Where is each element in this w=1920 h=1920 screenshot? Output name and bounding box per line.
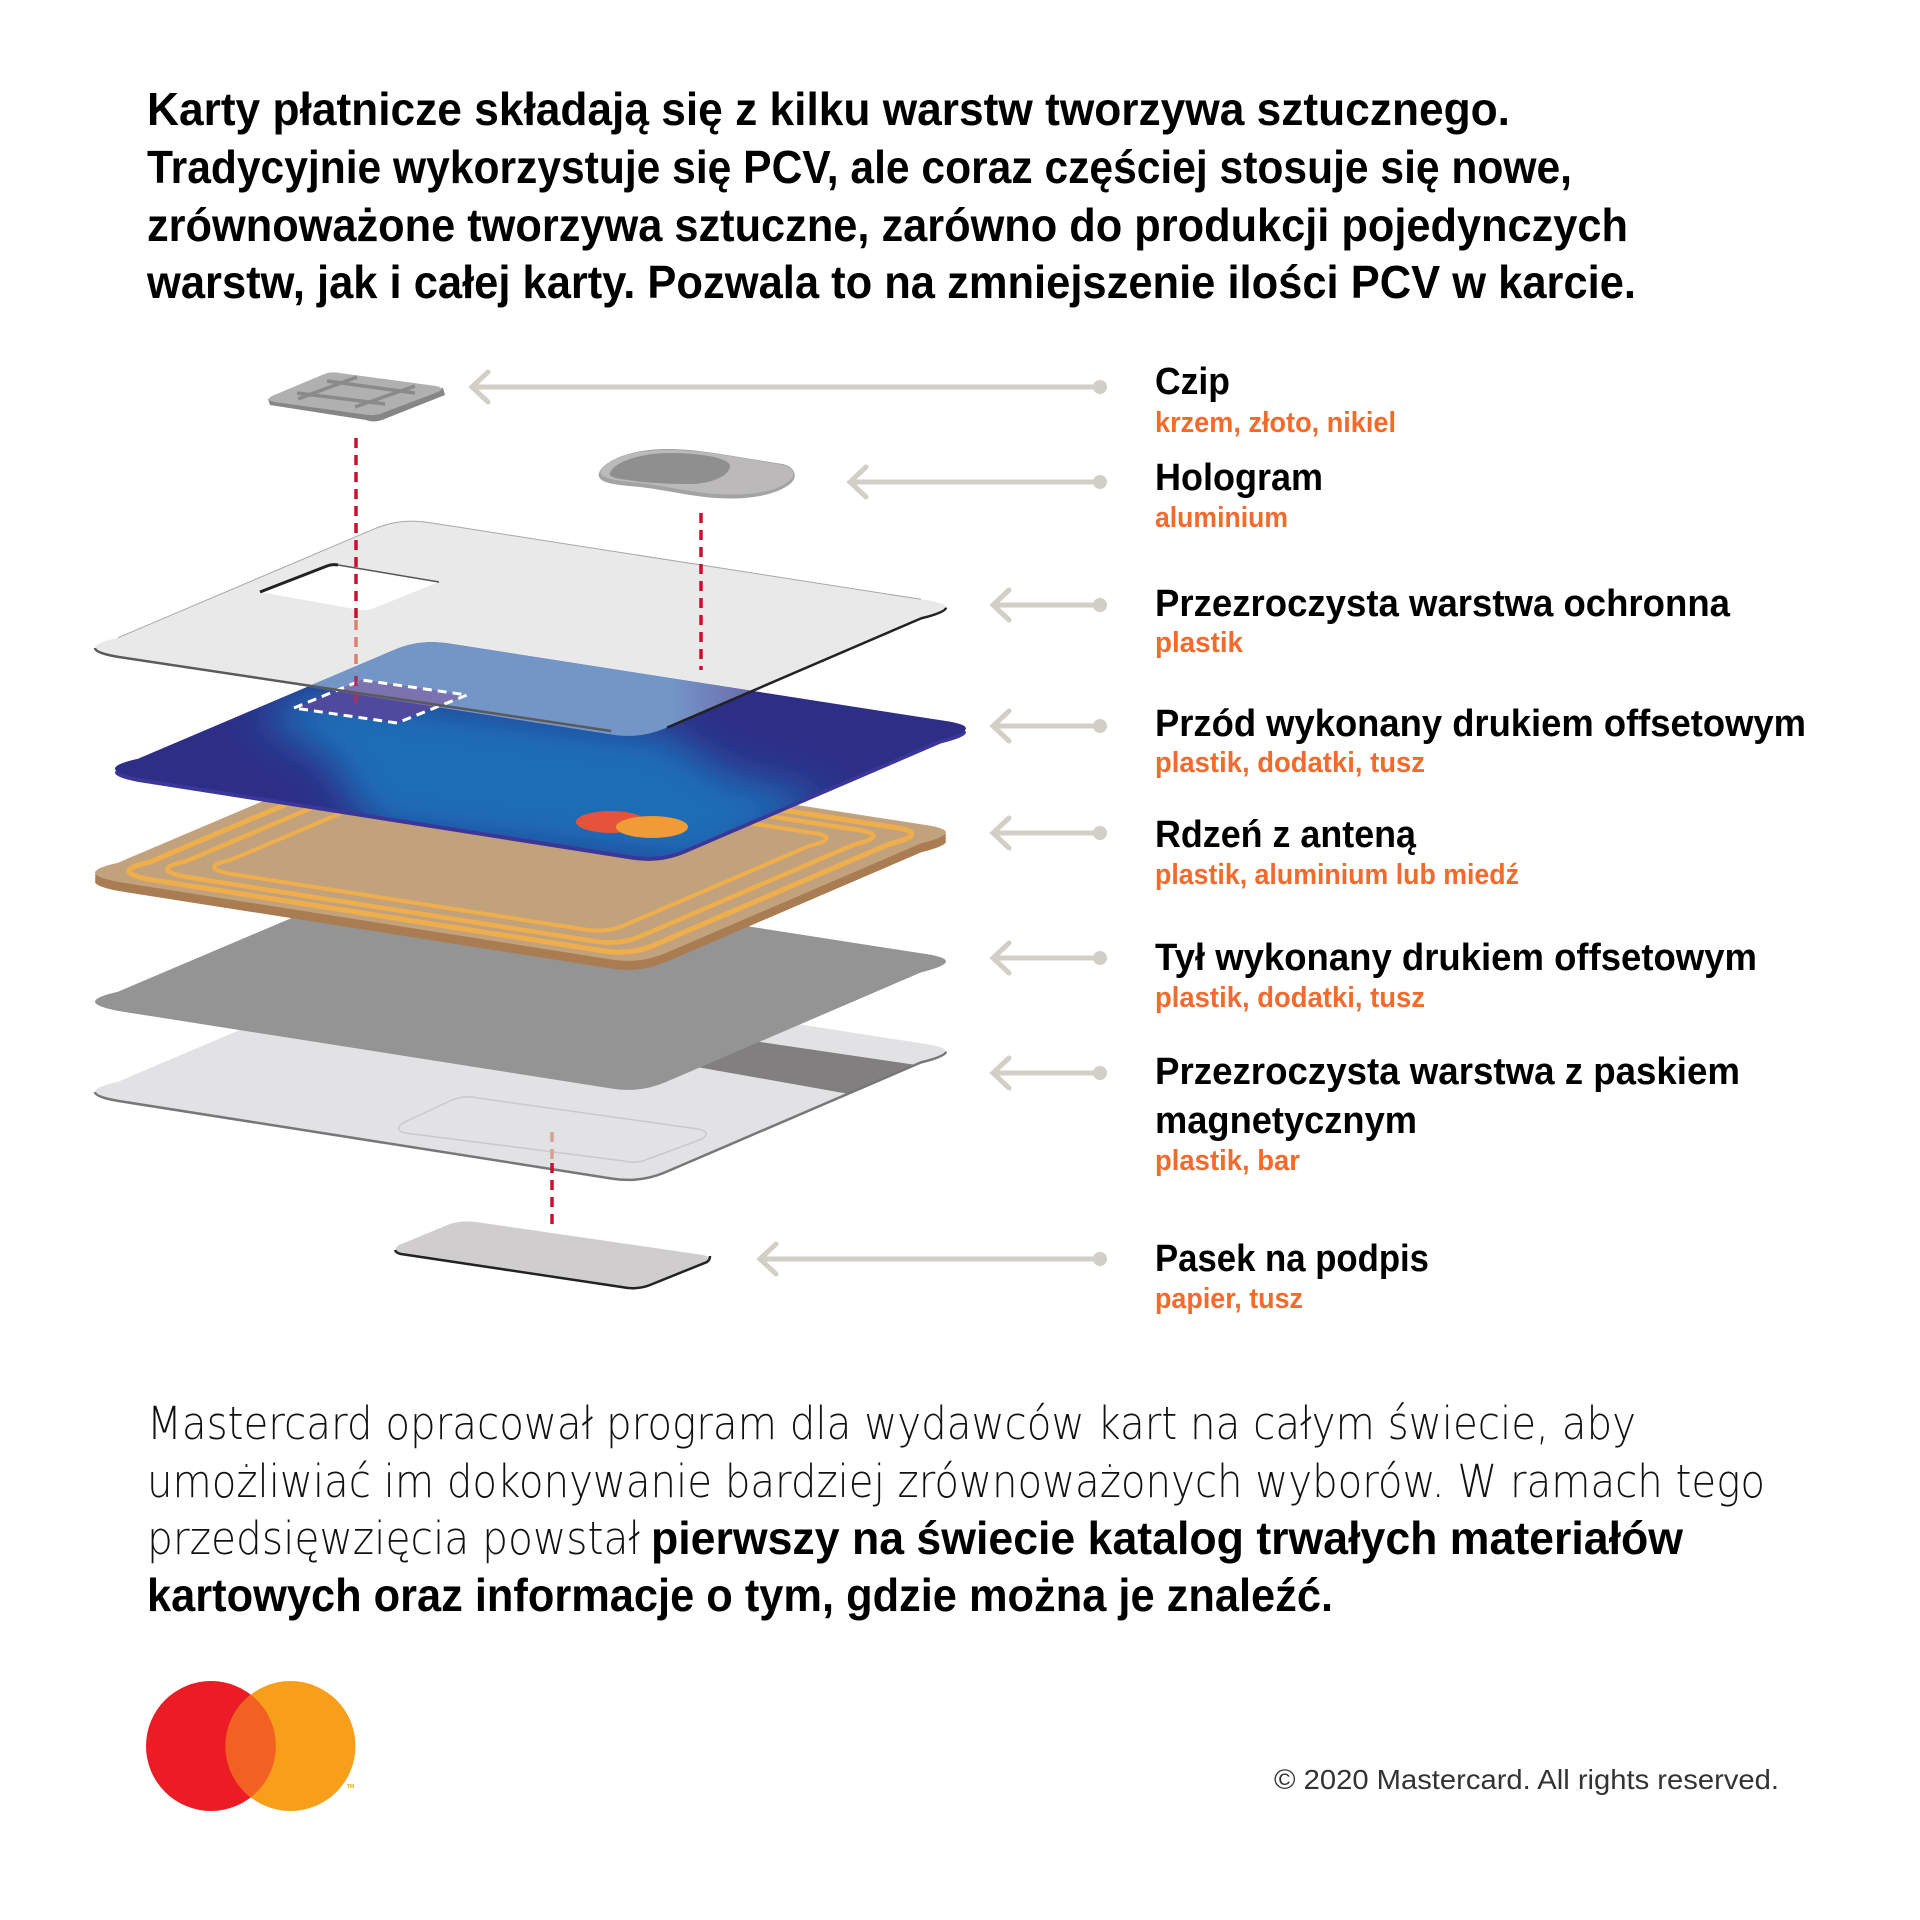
text block: closing paragraph: Mastercard opracował program dla wydawców kart na całym świecie, aby: [147, 1397, 1636, 1450]
label: front print: [1155, 703, 1806, 779]
label: signature strip: Pasek na podpis: [1155, 1238, 1429, 1280]
text block: closing paragraph: kartowych oraz informacje o tym, gdzie można je znaleźć.: [147, 1569, 1333, 1621]
title: intro paragraph: warstw, jak i całej karty. Pozwala to na zmniejszenie ilości PCV w karcie.: [146, 256, 1636, 308]
text block: closing paragraph: przedsięwzięcia powstał: [147, 1512, 640, 1565]
text block: closing paragraph: pierwszy na świecie katalog trwałych materiałów: [651, 1512, 1683, 1564]
label: hologram: [1155, 457, 1323, 534]
label: back print: Tył wykonany drukiem offsetowym: [1155, 937, 1757, 979]
label: signature strip: [1155, 1238, 1429, 1315]
label: protective layer: plastik: [1155, 627, 1244, 659]
arrow: back print: [993, 943, 1107, 973]
text block: closing paragraph: umożliwiać im dokonywanie bardziej zrównoważonych wyborów. W ramach tego: [147, 1455, 1765, 1508]
layer: offset-printed back: [95, 875, 946, 1090]
chip position marker: [294, 680, 467, 723]
label: chip: [1155, 361, 1396, 439]
arrow: chip: [472, 372, 1107, 402]
label: core: [1155, 814, 1519, 891]
connector: chip dashed line: [354, 438, 358, 703]
mini logo: [576, 811, 688, 838]
title: intro paragraph: zrównoważone tworzywa sztuczne, zarówno do produkcji pojedynczych: [147, 199, 1628, 251]
transparent overlap: [308, 642, 750, 736]
connector: signature strip dashed line: [550, 1132, 554, 1226]
logo: Mastercard: TM: [347, 1784, 354, 1790]
layer: transparent back with magnetic stripe: [94, 1024, 948, 1182]
label: protective layer: [1155, 583, 1731, 659]
label: hologram: Hologram: [1155, 457, 1323, 499]
label: hologram: aluminium: [1155, 502, 1288, 534]
copyright: © 2020 Mastercard. All rights reserved.: [1274, 1764, 1779, 1795]
label: magnetic layer: [1155, 1051, 1740, 1177]
label: magnetic layer: Przezroczysta warstwa z paskiem: [1155, 1051, 1740, 1093]
label: front print: Przód wykonany drukiem offsetowym: [1155, 703, 1806, 745]
title: intro paragraph: Karty płatnicze składają się z kilku warstw tworzywa sztucznego.: [147, 83, 1510, 135]
label: signature strip: papier, tusz: [1155, 1283, 1303, 1315]
title: intro paragraph: Tradycyjnie wykorzystuje się PCV, ale coraz częściej stosuje się nowe,: [147, 141, 1572, 193]
label: chip: Czip: [1155, 361, 1230, 403]
chip window: [260, 565, 439, 610]
label: core: Rdzeń z anteną: [1155, 814, 1417, 856]
layer: offset-printed front: [95, 608, 966, 870]
chip: [268, 372, 445, 422]
label: front print: plastik, dodatki, tusz: [1155, 747, 1425, 779]
label: core: plastik, aluminium lub miedź: [1155, 859, 1519, 891]
arrow: core: [993, 818, 1107, 848]
label: protective layer: Przezroczysta warstwa ochronna: [1155, 583, 1731, 625]
label: chip: krzem, złoto, nikiel: [1155, 407, 1396, 439]
arrow: signature strip: [760, 1244, 1107, 1274]
arrow: hologram: [850, 467, 1107, 497]
protective layer edge: [95, 608, 946, 731]
arrow: front print: [993, 711, 1107, 741]
label: back print: plastik, dodatki, tusz: [1155, 982, 1425, 1014]
diagram: exploded card layers: [95, 372, 966, 1288]
label: magnetic layer: plastik, bar: [1155, 1145, 1300, 1177]
text block: closing paragraph: [147, 1397, 1765, 1621]
arrow: protective layer: [993, 590, 1107, 620]
connector: hologram dashed line: [699, 513, 703, 670]
logo: Mastercard: [146, 1681, 356, 1811]
layer: transparent protective front: [95, 521, 946, 736]
title: intro paragraph: [146, 83, 1636, 308]
label: magnetic layer: magnetycznym: [1155, 1100, 1417, 1142]
label: back print: [1155, 937, 1757, 1014]
layer: core with antenna: [95, 746, 946, 970]
signature strip: [395, 1221, 710, 1288]
arrow: magnetic layer: [993, 1058, 1107, 1088]
hologram: [599, 449, 795, 498]
